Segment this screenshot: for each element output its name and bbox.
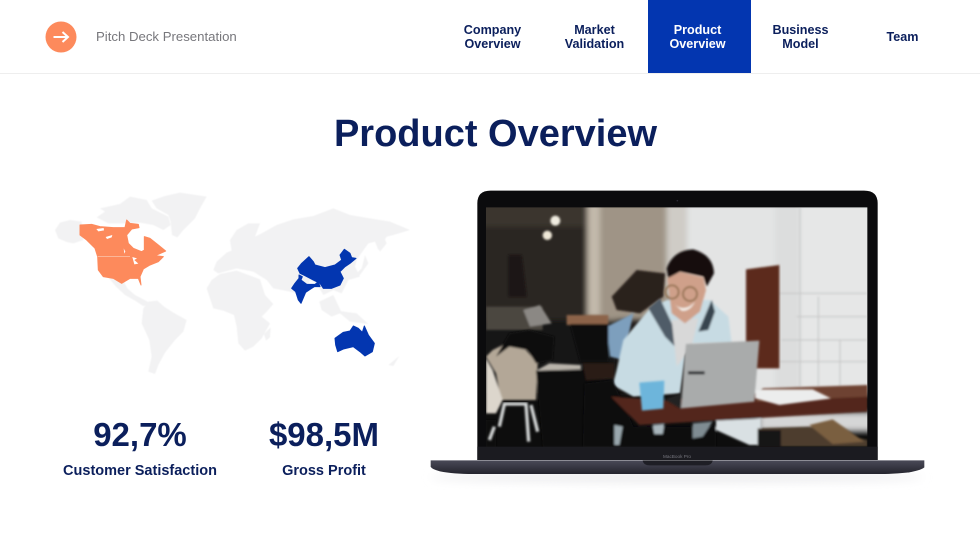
nav: Market Validation: Market <box>574 22 615 36</box>
brick lines <box>778 207 867 387</box>
header bar <box>0 0 980 74</box>
nav: Business Model <box>772 22 828 51</box>
Australia highlighted <box>335 326 374 356</box>
value: 92,7% <box>93 416 187 453</box>
label: Gross Profit <box>282 463 366 479</box>
model text: MacBook Pro <box>663 454 691 459</box>
laptop lid <box>477 191 878 460</box>
laptop shadow <box>430 472 923 483</box>
screen photo <box>480 203 875 453</box>
nav: Company Overview <box>464 22 521 51</box>
left seated people and chair <box>486 329 614 415</box>
chairs <box>489 404 538 442</box>
deck label: Pitch Deck Presentation <box>96 29 237 44</box>
North America highlighted <box>80 220 166 285</box>
icon: orange arrow circle <box>46 22 76 52</box>
nav: Market Validation <box>564 22 624 51</box>
wall panel <box>746 265 779 368</box>
China highlighted <box>298 249 356 288</box>
trackpad notch <box>643 460 713 465</box>
background scene <box>486 216 665 362</box>
nav: Product Overview active: Overview <box>669 37 726 51</box>
nav: Product Overview active: Product <box>674 22 721 36</box>
nav: Team: Team <box>887 30 918 44</box>
person <box>613 249 732 397</box>
nav: Business Model: Model <box>782 37 819 51</box>
value: $98,5M <box>269 416 379 453</box>
laptop base <box>431 460 924 474</box>
webcam <box>676 200 678 202</box>
lower table, legs and bags <box>583 380 868 447</box>
laptop mockup <box>430 190 924 484</box>
papers, mug and grey laptop <box>639 341 831 411</box>
label: Customer Satisfaction <box>63 463 217 479</box>
India highlighted <box>292 275 320 303</box>
nav: Market Validation: Validation <box>565 37 624 51</box>
stat: gross profit <box>269 416 379 479</box>
nav: Company Overview: Overview <box>464 37 520 51</box>
title: Product Overview <box>334 113 657 155</box>
screen bottom bezel <box>477 447 878 460</box>
nav: Product Overview active <box>648 0 751 73</box>
stat: customer satisfaction <box>63 416 217 479</box>
nav: Business Model: Business <box>772 22 828 36</box>
nav: Company Overview: Company <box>464 22 521 36</box>
world map <box>56 193 408 374</box>
grey land masses <box>55 193 410 374</box>
